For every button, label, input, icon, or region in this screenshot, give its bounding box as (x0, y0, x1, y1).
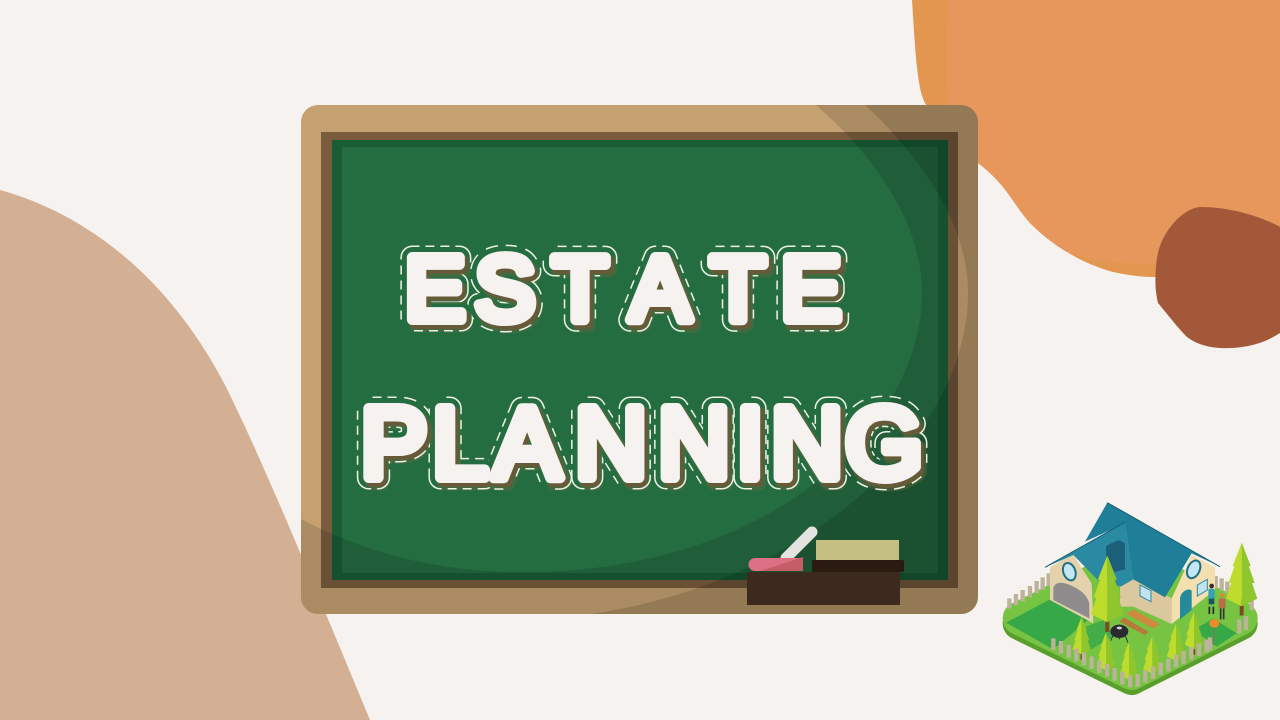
right gable wall (1172, 555, 1215, 624)
icon: isometric house with garden (1006, 503, 1257, 687)
wooden frame (301, 105, 978, 614)
chimney (1106, 540, 1125, 574)
back fence (1009, 573, 1252, 610)
chalk tray (747, 572, 900, 605)
front roof (1045, 522, 1133, 587)
chalk stick (786, 532, 812, 558)
garage door (1053, 583, 1089, 618)
title: PLANNING: PLANNING (361, 388, 923, 500)
square windows (1140, 579, 1207, 602)
lawn (1019, 562, 1241, 673)
board surface (332, 140, 948, 580)
board eraser (812, 540, 904, 572)
chalkboard (295, 100, 985, 620)
title: PLANNING: PLANNING (364, 392, 926, 504)
front fence (1053, 616, 1246, 687)
main roof (1085, 503, 1220, 597)
big right tree (1226, 543, 1257, 615)
darker grass patches (1006, 599, 1237, 650)
decorative blob: top right orange (912, 0, 1280, 277)
round windows (1061, 558, 1203, 582)
shadow overlay: inner curve (295, 100, 985, 620)
title: PLANNING: PLANNING (361, 388, 923, 500)
big left tree (1091, 555, 1124, 632)
barbecue (1209, 619, 1219, 645)
house (1045, 503, 1220, 624)
garage wing wall (1050, 554, 1093, 623)
middle wall (1120, 578, 1172, 624)
title: ESTATE: ESTATE (408, 244, 844, 344)
title: ESTATE: ESTATE (405, 240, 841, 340)
shadow overlay: outer curve (591, 105, 978, 614)
pink eraser (748, 557, 803, 571)
inner frame (321, 132, 958, 588)
title: ESTATE: ESTATE (405, 240, 841, 340)
grill (1110, 625, 1128, 643)
benches (1119, 609, 1160, 635)
small trees (1072, 612, 1203, 685)
decorative blob: left tan (0, 190, 370, 720)
title: PLANNING: PLANNING (365, 393, 927, 505)
title: ESTATE: ESTATE (409, 245, 845, 345)
door (1180, 590, 1192, 619)
decorative blob: dark brown (1155, 207, 1280, 348)
people (1208, 584, 1226, 619)
lawn base edge (1019, 567, 1241, 678)
